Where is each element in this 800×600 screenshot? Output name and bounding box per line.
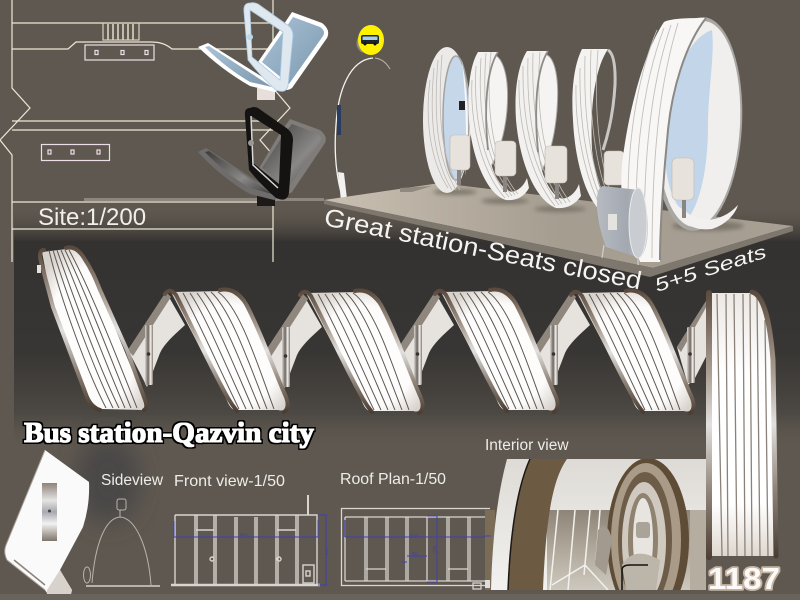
interior view render (485, 458, 706, 600)
seat pad (198, 148, 280, 200)
frame (244, 3, 293, 91)
seat pad (198, 43, 280, 92)
front view label: Front view-1/50 (174, 473, 285, 490)
front view drawing: 615 (240, 532, 248, 537)
grey floor shadow line (84, 198, 324, 201)
bus bay upper (85, 45, 154, 60)
seats count caption: 5+5 Seats (652, 242, 770, 297)
ring shadows on platform (433, 189, 744, 231)
roof plan drawing: 616 (410, 533, 418, 538)
front view drawing (171, 495, 329, 585)
back pad (258, 12, 328, 90)
back pad (258, 119, 326, 194)
site plan drawing (0, 0, 290, 262)
sideview drawing (84, 499, 160, 586)
waste bin (597, 186, 648, 265)
ribbon segment 1 (37, 247, 146, 410)
platform (324, 183, 793, 277)
dark smudge lower left (76, 436, 140, 524)
side render (5, 450, 89, 594)
stair block (103, 23, 139, 40)
bus stop sign pole (335, 58, 390, 201)
roof plan drawing (342, 508, 502, 589)
pole blade (338, 172, 347, 201)
dark band behind ribbon (14, 205, 800, 450)
spiral roof render (37, 247, 777, 560)
icon: yellow bus sign (356, 25, 384, 55)
ribbon segment 4 (435, 290, 558, 412)
front view drawing: 261 (324, 547, 329, 555)
seat ring 3 (515, 51, 581, 208)
notice (459, 101, 465, 110)
bus bay lower (42, 144, 110, 160)
site scale label: Site:1/200 (38, 204, 146, 231)
roof plan drawing: 236 (432, 545, 437, 553)
slot (42, 483, 57, 541)
project number: 1187 (708, 561, 780, 596)
sideview label: Sideview (101, 472, 164, 489)
roof plan drawing: 82 (412, 551, 418, 556)
seat dark (198, 107, 326, 206)
seat light (198, 3, 328, 100)
connectors (128, 292, 590, 389)
bottom strip (0, 594, 800, 600)
roof plan label: Roof Plan-1/50 (340, 471, 446, 488)
great station caption: Great station-Seats closed (322, 203, 644, 295)
ribbon segment 2 (165, 290, 288, 412)
seat ring 1 (423, 47, 471, 193)
end connector (677, 298, 712, 385)
main title: Bus station-Qazvin city (24, 417, 314, 449)
interior label: Interior view (485, 437, 569, 454)
frame (245, 107, 293, 200)
seat pad (450, 135, 470, 170)
seat ring 5 (621, 15, 748, 262)
pole panel (337, 105, 341, 135)
seat ring 2 (468, 52, 529, 200)
ribbon segment 3 (300, 291, 423, 413)
ribbon segment 5 (571, 291, 694, 413)
seat ring 4 (572, 49, 624, 215)
ribbon segment 6 vertical (706, 290, 777, 560)
